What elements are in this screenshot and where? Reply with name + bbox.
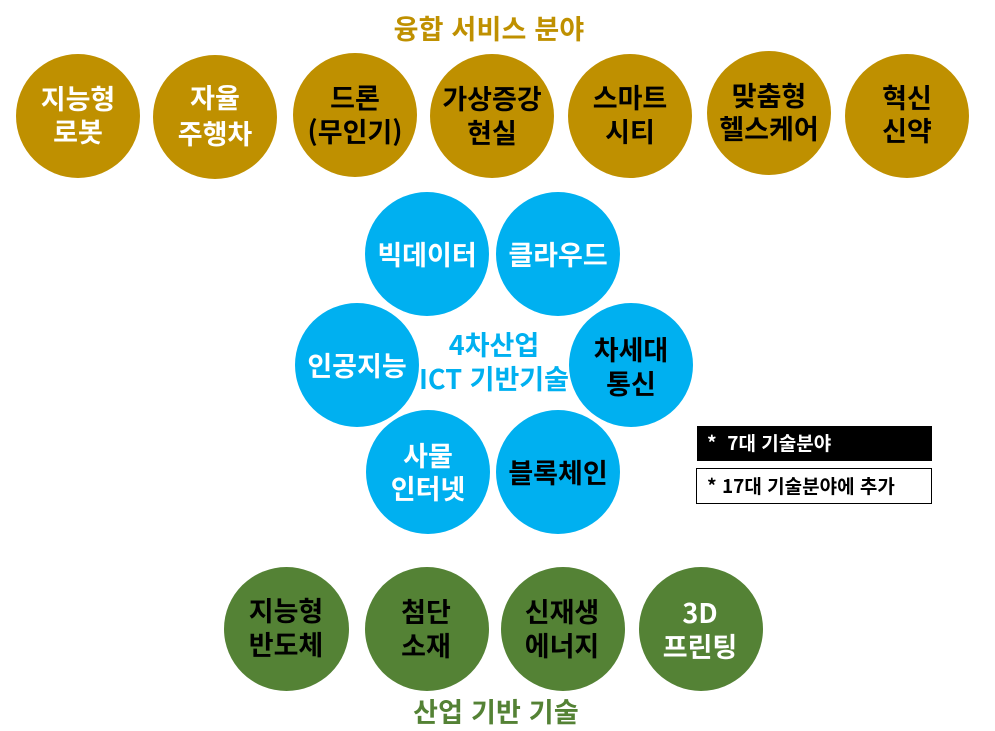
circle: custom healthcare: 맞춤형 [732,75,806,114]
circle: renewable energy [501,567,625,691]
circle: next generation communication [569,303,693,427]
circle: blockchain [496,410,620,534]
center label: 4차산업 [449,324,539,363]
circle: intelligent semiconductor: 지능형 [249,590,323,629]
circle: internet of things: 인터넷 [391,468,465,507]
circle: 3D printing [639,567,763,691]
circle: smart city [568,54,692,178]
circle: next generation communication: 차세대 [594,329,668,368]
circle: innovative medicine [845,54,969,178]
circle: renewable energy: 신재생 [525,591,599,630]
legend: added to seventeen fields: * 17대 기술분야에 추가 [707,472,895,499]
circle: drone: 드론 [330,76,380,116]
circle: smart city: 시티 [605,111,655,150]
circle: renewable energy: 에너지 [525,625,599,664]
circle: AR VR: 가상증강 [442,78,542,117]
circle: artificial intelligence: 인공지능 [307,345,407,384]
circle: cloud [496,192,620,316]
circle: AR VR: 현실 [467,112,517,151]
circle: 3D printing: 프린팅 [663,626,737,665]
circle: AR VR [430,54,554,178]
circle: cloud: 클라우드 [508,234,608,273]
circle: artificial intelligence [295,303,419,427]
panel: convergence services [16,51,969,179]
heading: industrial foundation technologies: 산업 기반 기술 [413,691,579,730]
panel: ICT core technologies [295,192,693,534]
legend: seven technology fields [697,426,932,461]
circle: big data: 빅데이터 [377,234,477,273]
circle: internet of things: 사물 [403,435,453,474]
circle: big data [365,192,489,316]
circle: smart city: 스마트 [593,77,667,116]
circle: intelligent robot: 지능형 [41,78,115,117]
center label: ICT 기반기술 [419,358,569,397]
circle: autonomous vehicle: 자율 [190,77,240,116]
circle: custom healthcare: 헬스케어 [719,108,819,147]
circle: intelligent robot [16,54,140,178]
circle: next generation communication: 통신 [606,363,656,402]
circle: drone: (무인기) [308,110,402,150]
circle: autonomous vehicle: 주행차 [178,113,252,152]
circle: advanced materials: 첨단 [401,591,451,630]
heading: convergence service fields: 융합 서비스 분야 [394,8,584,47]
circle: intelligent robot: 로봇 [53,111,103,150]
circle: custom healthcare [707,51,831,175]
circle: innovative medicine: 신약 [882,110,932,149]
panel: industrial foundation technologies [224,567,763,691]
circle: intelligent semiconductor: 반도체 [249,624,323,663]
circle: autonomous vehicle [153,55,277,179]
circle: advanced materials [365,567,489,691]
circle: drone [293,53,417,177]
circle: 3D printing: 3D [682,592,718,631]
circle: intelligent semiconductor [224,567,349,691]
circle: innovative medicine: 혁신 [882,77,932,116]
center label [419,324,569,397]
circle: internet of things [366,410,490,534]
circle: advanced materials: 소재 [401,625,451,664]
legend: seven technology fields: * 7대 기술분야 [707,429,831,456]
circle: blockchain: 블록체인 [508,452,608,491]
legend: added to seventeen fields [696,468,932,504]
